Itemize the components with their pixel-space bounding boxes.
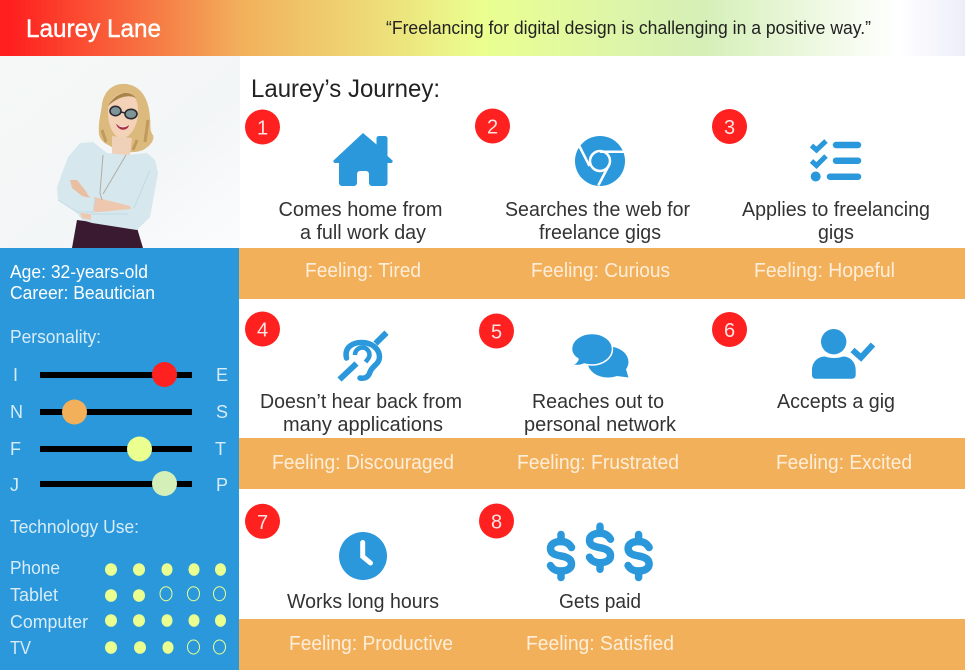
feeling band 3: Feeling: Satisfied [526,633,674,655]
icon: chat bubbles [572,334,628,378]
step text [524,391,677,436]
icon: hearing disabled [340,333,386,380]
slider: J to P: P [216,475,228,495]
portrait photo [0,56,240,248]
feeling band 1: Feeling: Curious [531,260,670,282]
age and career: Age: 32-years-old [10,262,148,282]
step 2: 2 [487,116,498,138]
step 6 [712,312,895,413]
phone rating [10,558,226,578]
step text: Accepts a gig [777,391,895,413]
step 8: 8 [491,512,502,534]
feeling band 1 [239,248,965,299]
step 1 [245,110,442,244]
feeling band 2 [239,438,965,489]
feeling band 2: Feeling: Frustrated [517,452,679,474]
step 5: 5 [491,322,502,344]
step text: Applies to freelancing [742,199,930,221]
step 6: 6 [724,320,735,342]
feeling band 1: Feeling: Tired [305,260,421,282]
step text: freelance gigs [539,222,661,244]
step 4: 4 [257,320,268,342]
step 4 [245,312,462,436]
step text: personal network [524,414,677,436]
step text [742,199,930,244]
age and career: Career: Beautician [10,283,155,303]
slider: F to T: T [215,439,226,459]
tv rating: TV [10,638,31,658]
slider: I to E: E [216,365,228,385]
step 3: 3 [724,117,735,139]
slider: I to E [13,362,228,387]
phone rating: Phone [10,558,60,578]
slider: I to E: I [13,365,18,385]
slider: N to S: N [10,402,23,422]
step 2 [475,108,690,244]
step text: Reaches out to [532,391,664,413]
step 3 [712,109,930,244]
persona name: Laurey Lane [26,15,161,43]
step text: Works long hours [287,591,439,613]
step text: Searches the web for [505,199,690,221]
step text [278,199,442,244]
slider: F to T [10,436,226,462]
tablet rating: Tablet [10,585,58,605]
slider: J to P [10,471,228,496]
step 7 [245,504,439,613]
slider: N to S [10,400,228,424]
feeling band 2: Feeling: Excited [776,452,912,474]
feeling band 3: Feeling: Productive [289,633,453,655]
tablet rating [10,585,226,605]
profile panel [0,248,239,670]
personality heading: Personality: [10,327,101,347]
step text: a full work day [300,222,426,244]
step text: many applications [283,414,443,436]
feeling band 3 [239,619,965,670]
step 5 [479,314,677,436]
slider: N to S: S [216,402,228,422]
step 7: 7 [257,512,268,534]
slider: F to T: F [10,439,21,459]
step text: gigs [818,222,854,244]
step 8 [479,504,649,613]
icon: person with check [812,329,873,379]
step text [260,391,462,436]
quote: “Freelancing for digital design is challenging in a positive way.” [386,18,871,38]
technology heading: Technology Use: [10,517,139,537]
step text: Doesn’t hear back from [260,391,462,413]
feeling band 1: Feeling: Hopeful [754,260,895,282]
header banner [0,0,965,56]
icon: dollar signs [550,526,649,578]
icon: house [333,133,393,186]
feeling band 2: Feeling: Discouraged [272,452,454,474]
icon: checklist [811,141,858,182]
step 1: 1 [257,118,268,140]
step text [505,199,690,244]
step text: Gets paid [559,591,641,613]
slider: J to P: J [10,475,19,495]
computer rating: Computer [10,612,88,632]
age and career [10,262,155,303]
computer rating [10,612,226,632]
journey heading: Laurey’s Journey: [251,75,440,103]
tv rating [10,638,226,658]
icon: clock [339,532,387,580]
icon: browser [575,136,625,186]
step text: Comes home from [278,199,442,221]
